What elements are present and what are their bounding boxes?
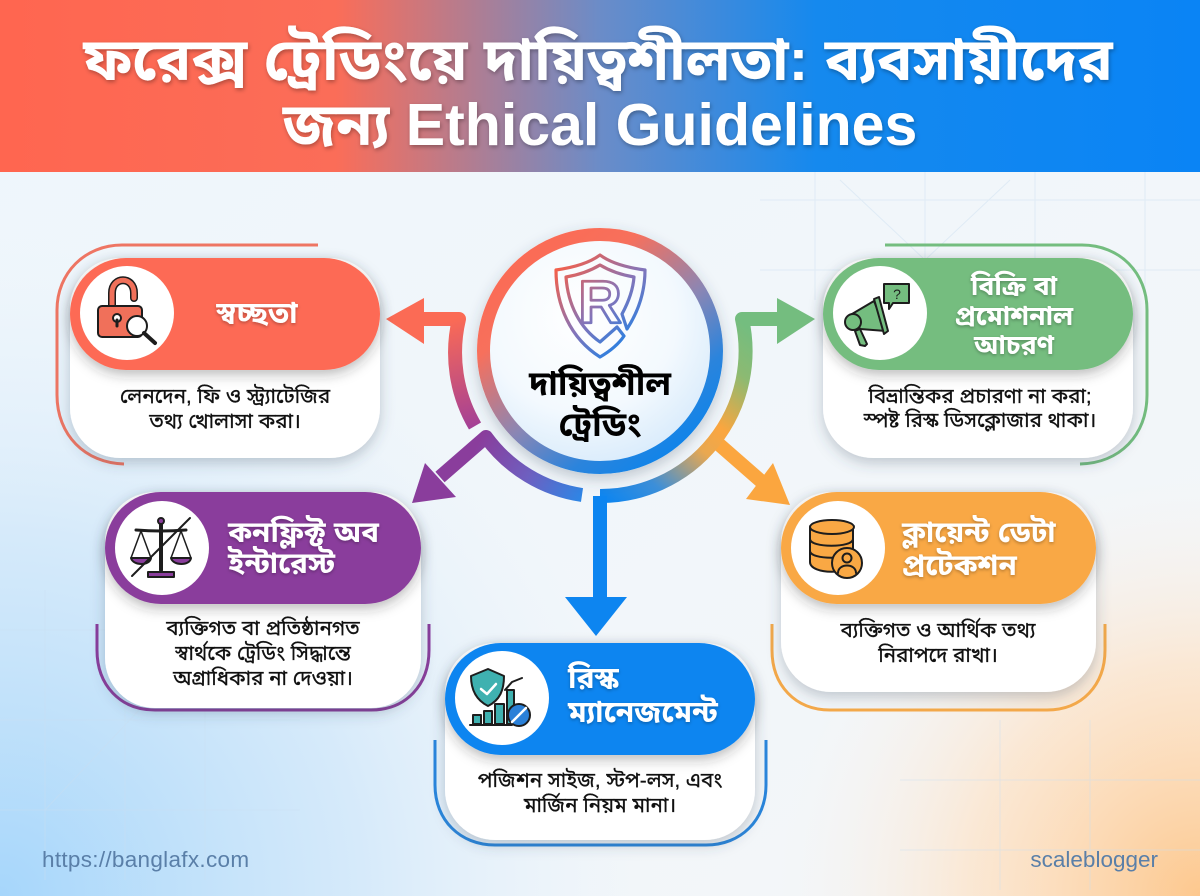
icon: megaphone: ? [893,286,901,302]
central label: ট্রেডিং [559,404,641,444]
panel: sales and promotional conduct [823,245,1147,464]
description [478,768,722,817]
arrow: red to transparency [386,298,475,426]
heading: ম্যানেজমেন্ট [567,694,719,729]
heading [567,660,719,729]
central circle [477,228,723,474]
heading [955,270,1074,360]
description: লেনদেন, ফি ও স্ট্র্যাটেজির [120,384,331,408]
arrow: blue to risk management [565,496,627,636]
title: ফরেক্স ট্রেডিংয়ে দায়িত্বশীলতা: ব্যবসায়ীদের [82,26,1114,93]
central label [528,363,672,444]
description [120,384,331,433]
heading [227,514,380,580]
arrow: orange to client data [714,440,790,505]
description: তথ্য খোলাসা করা। [148,410,301,433]
description: পজিশন সাইজ, স্টপ-লস, এবং [478,768,722,792]
description: নিরাপদে রাখা। [877,643,998,667]
heading [901,514,1056,582]
description: স্বার্থকে ট্রেডিং সিদ্ধান্তে [174,640,351,665]
icon: crossed scales [131,518,191,577]
panel: conflict of interest [97,492,429,710]
icon: shield logo: R [578,269,622,336]
heading: স্বচ্ছতা [215,297,298,330]
title [82,26,1114,158]
description [840,617,1036,667]
heading: প্রমোশনাল [955,301,1074,331]
header banner [0,0,1200,172]
description [165,615,360,690]
heading: রিস্ক [567,660,620,695]
arrow: purple to conflict of interest [412,437,582,503]
heading: আচরণ [973,330,1055,360]
arrow: green to sales conduct [600,298,815,496]
description: অগ্রাধিকার না দেওয়া। [172,666,353,690]
heading: ক্লায়েন্ট ডেটা [901,514,1056,549]
heading: কনফ্লিক্ট অব [227,514,380,549]
icon: database with user [810,520,862,578]
footer brand: scaleblogger [1030,847,1158,872]
heading: ইন্টারেস্ট [227,545,336,580]
central label: দায়িত্বশীল [528,363,672,403]
description: বিভ্রান্তিকর প্রচারণা না করা; [867,384,1092,408]
icon: shield logo [556,255,645,357]
description: ব্যক্তিগত বা প্রতিষ্ঠানগত [165,615,360,640]
description: স্পষ্ট রিস্ক ডিসক্লোজার থাকা। [863,408,1096,432]
heading: বিক্রি বা [970,270,1058,301]
icon: megaphone [845,284,909,346]
panel: transparency [57,245,380,464]
description: ব্যক্তিগত ও আর্থিক তথ্য [840,617,1036,642]
title: জন্য Ethical Guidelines [282,92,917,158]
description [863,384,1096,432]
panel: client data protection [772,492,1105,710]
icon: shield and chart [470,669,530,726]
panel: risk management [435,643,766,845]
icon: open lock with magnifier [98,280,155,343]
description: মার্জিন নিয়ম মানা। [523,792,676,817]
heading: প্রটেকশন [902,547,1017,582]
footer link: https://banglafx.com [42,847,249,872]
